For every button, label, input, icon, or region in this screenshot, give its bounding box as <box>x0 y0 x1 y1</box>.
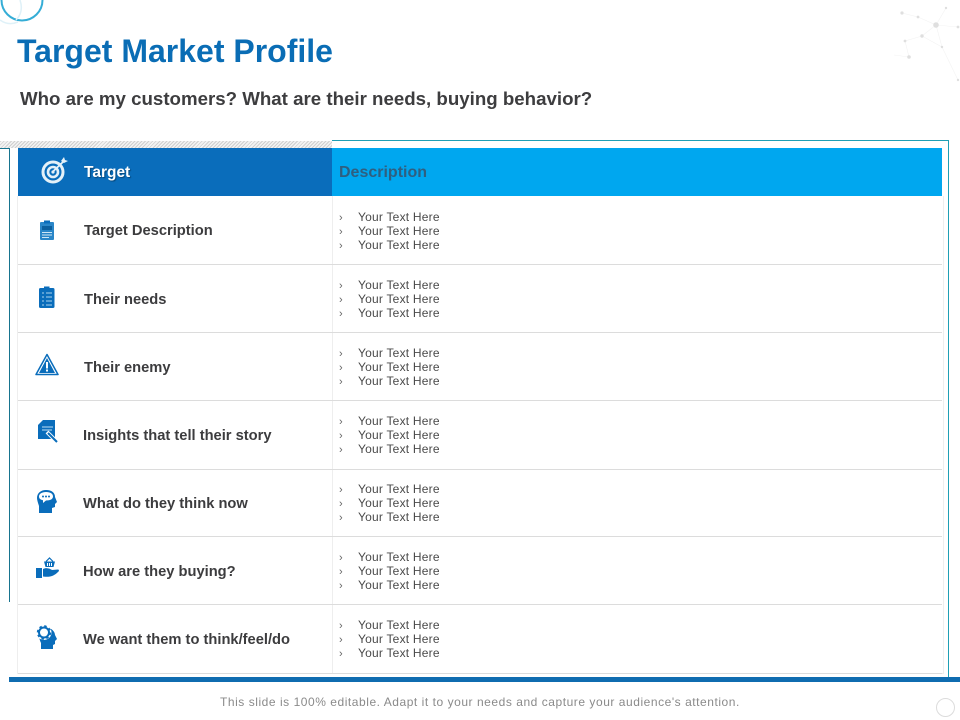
row text: We want them: Your Text Here <box>358 632 440 646</box>
subtitle: Who are my customers? What are their needs, buying behavior? <box>20 88 592 109</box>
row text: Their needs: › <box>339 308 343 320</box>
row text: Insights: Your Text Here <box>358 442 440 456</box>
row label: What do they think now: What do they think now <box>83 496 248 512</box>
row text: What do they think now: Your Text Here <box>358 510 440 524</box>
row text: What do they think now: › <box>339 498 343 510</box>
icon: document with pen <box>38 420 58 443</box>
row text: Their enemy: Your Text Here <box>358 360 440 374</box>
row text: Their enemy: › <box>339 348 343 360</box>
icon: clipboard <box>40 220 54 240</box>
row text: We want them: › <box>339 634 343 646</box>
row text: Target Description: Your Text Here <box>358 210 440 224</box>
row text: Target Description <box>339 210 440 252</box>
row text: Their enemy <box>339 346 440 388</box>
row text: Their needs <box>339 278 440 320</box>
row text: We want them: › <box>339 648 343 660</box>
left frame line <box>0 148 10 602</box>
row text: Target Description: › <box>339 226 343 238</box>
row text: How are they buying?: Your Text Here <box>358 578 440 592</box>
decoration: network dots top-right <box>894 6 960 82</box>
bottom bar <box>9 677 960 682</box>
header label: Description: Description <box>339 164 427 181</box>
row text: Their needs: Your Text Here <box>358 292 440 306</box>
row label: Insights that tell their story: Insights that tell their story <box>83 428 272 444</box>
row text: What do they think now: › <box>339 484 343 496</box>
row text: Their enemy: Your Text Here <box>358 346 440 360</box>
title: Target Market Profile <box>17 33 333 69</box>
row text: How are they buying?: Your Text Here <box>358 550 440 564</box>
row text: We want them: Your Text Here <box>358 646 440 660</box>
icon: target <box>42 157 68 184</box>
row label: Their enemy: Their enemy <box>84 360 171 376</box>
row text: Their needs: Your Text Here <box>358 278 440 292</box>
row text: Their needs: › <box>339 280 343 292</box>
decoration: top-left circle <box>0 0 44 24</box>
row label: How are they buying?: How are they buying? <box>83 564 236 580</box>
row text: How are they buying?: Your Text Here <box>358 564 440 578</box>
header label: Target: Target <box>84 164 130 181</box>
row label: Target Description: Target Description <box>84 223 213 239</box>
row text: How are they buying? <box>339 550 440 592</box>
table body outline <box>17 196 944 674</box>
row text: Insights: Your Text Here <box>358 428 440 442</box>
icon: head with gear <box>36 625 57 649</box>
table frame <box>332 140 949 678</box>
table panel <box>17 196 944 674</box>
icon: warning triangle <box>35 354 59 376</box>
column divider <box>332 196 333 673</box>
row text: Target Description: › <box>339 240 343 252</box>
row text: Their enemy: Your Text Here <box>358 374 440 388</box>
row text: Their enemy: › <box>339 362 343 374</box>
row text: How are they buying?: › <box>339 580 343 592</box>
icon: checklist <box>39 286 54 308</box>
row text: Insights <box>339 414 440 456</box>
row text: How are they buying?: › <box>339 566 343 578</box>
row text: We want them: Your Text Here <box>358 618 440 632</box>
row label: Their needs: Their needs <box>84 292 166 308</box>
header: target cell <box>18 148 332 196</box>
icon: hand with basket <box>36 557 59 578</box>
row text: We want them <box>339 618 440 660</box>
row text: Insights: › <box>339 430 343 442</box>
row text: Their needs: Your Text Here <box>358 306 440 320</box>
row text: What do they think now <box>339 482 440 524</box>
row text: Their needs: › <box>339 294 343 306</box>
row text: What do they think now: › <box>339 512 343 524</box>
row text: Insights: › <box>339 416 343 428</box>
header: description cell <box>332 148 942 196</box>
icon: head with speech bubble <box>37 490 57 513</box>
row text: What do they think now: Your Text Here <box>358 496 440 510</box>
row text: How are they buying?: › <box>339 552 343 564</box>
row text: Insights: › <box>339 444 343 456</box>
row text: Their enemy: › <box>339 376 343 388</box>
row text: Insights: Your Text Here <box>358 414 440 428</box>
row text: Target Description: › <box>339 212 343 224</box>
page number circle <box>936 698 955 717</box>
row text: Target Description: Your Text Here <box>358 224 440 238</box>
row text: We want them: › <box>339 620 343 632</box>
hatched strip <box>0 141 332 148</box>
row label: We want them to think/feel/do: We want them to think/feel/do <box>83 632 290 648</box>
row text: What do they think now: Your Text Here <box>358 482 440 496</box>
footer note: This slide is 100% editable. Adapt it to your needs and capture your audience's attention. <box>220 695 740 709</box>
row text: Target Description: Your Text Here <box>358 238 440 252</box>
